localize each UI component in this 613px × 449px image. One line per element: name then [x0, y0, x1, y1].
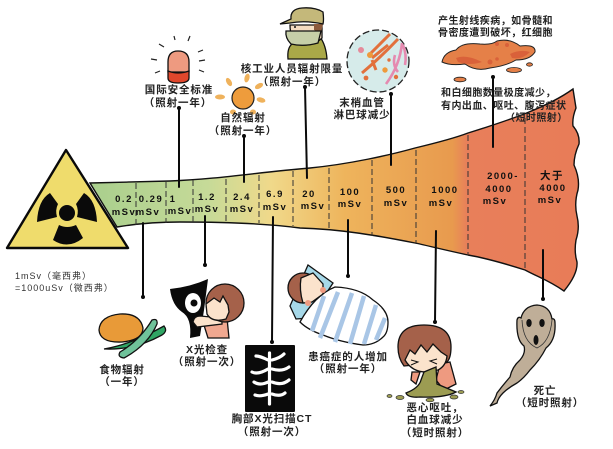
dose value labels: mSv [168, 206, 192, 217]
text: white blood cell symptoms: 和白细胞数量极度减少， [441, 86, 556, 99]
dose value labels: 大于 [540, 169, 564, 182]
label: x-ray exam: X光检查 [186, 343, 228, 356]
label: x-ray exam [173, 343, 241, 368]
label: capillaries and lymphocytes [334, 96, 390, 121]
dose value labels: 2.4 [233, 192, 251, 203]
label: capillaries and lymphocytes: 淋巴球减少 [334, 108, 390, 121]
dose value labels: 20 [302, 189, 316, 200]
dose value labels: 0.2 [115, 194, 133, 205]
icon: alarm siren [151, 36, 205, 83]
label: nuclear workers limit: （照射一年） [258, 75, 326, 88]
unit note: =1000uSv（微西弗） [15, 282, 114, 293]
dose value labels: mSv [538, 195, 562, 206]
label: food radiation: （一年） [99, 375, 145, 388]
dose value labels [112, 169, 567, 218]
dose value labels: 100 [340, 187, 360, 198]
label: chest CT scan: （照射一次） [238, 425, 306, 438]
icon: child hugging skeleton x-ray [170, 279, 244, 338]
dose value labels: 4000 [539, 183, 567, 194]
dose value labels: 1 [170, 194, 176, 205]
connector lines [141, 75, 545, 344]
icon: capillaries in a dashed circle [347, 30, 409, 92]
text: radiation diseases: 产生射线疾病，如骨髓和 [438, 14, 553, 27]
icon: food [99, 314, 166, 358]
label: nuclear workers limit [241, 62, 343, 88]
label: food radiation [99, 363, 145, 388]
label: death: （短时照射） [516, 396, 584, 409]
dose value labels: mSv [429, 198, 453, 209]
label: food radiation: 食物辐射 [99, 363, 145, 376]
label: x-ray exam: （照射一次） [173, 355, 241, 368]
unit note: 1mSv（毫西弗） [15, 270, 92, 281]
label: more cancer cases [308, 350, 388, 375]
dose value labels: 6.9 [266, 189, 284, 200]
text: white blood cell symptoms: 有内出血、呕吐、腹泻症状 [441, 99, 566, 112]
icon: chest x-ray film [245, 345, 295, 412]
label: international standard: （照射一年） [144, 96, 212, 109]
dose value labels: mSv [112, 207, 136, 218]
label: international standard [144, 83, 213, 109]
label: nausea and low white cells: （短时照射） [401, 426, 469, 439]
label: nausea and low white cells: 白血球减少 [406, 413, 464, 426]
label: capillaries and lymphocytes: 末梢血管 [339, 96, 385, 109]
label: death [516, 384, 584, 409]
dose value labels: 4000 [485, 184, 513, 195]
text: radiation diseases: 骨密度遭到破坏，红细胞 [438, 26, 553, 39]
dose value labels: mSv [263, 202, 287, 213]
icon: vomiting child [387, 325, 464, 402]
dose scale band [90, 89, 579, 291]
dose value labels: mSv [338, 199, 362, 210]
text: white blood cell symptoms [441, 86, 568, 124]
dose value labels: 0.29 [139, 194, 163, 205]
label: more cancer cases: （照射一年） [314, 362, 382, 375]
dose value labels: mSv [483, 196, 507, 207]
label: nausea and low white cells: 恶心呕吐， [406, 402, 464, 414]
text: radiation diseases [438, 14, 553, 39]
dose value labels: 2000- [487, 171, 519, 182]
label: natural radiation: 自然辐射 [220, 111, 266, 124]
label: natural radiation: （照射一年） [209, 124, 277, 137]
label: chest CT scan [232, 412, 312, 438]
dose value labels: mSv [384, 198, 408, 209]
icon: scream ghost [490, 305, 555, 406]
dose value labels: 1000 [431, 185, 459, 196]
dose value labels: mSv [136, 207, 160, 218]
label: death: 死亡 [534, 384, 556, 397]
label: international standard: 国际安全标准 [145, 83, 213, 96]
unit note [15, 270, 114, 293]
icon: cancer patient in bed [288, 265, 388, 345]
label: nausea and low white cells [401, 402, 469, 439]
dose value labels: mSv [195, 204, 219, 215]
icon: blood puddle [442, 40, 535, 82]
icon: sun [215, 73, 266, 114]
text: white blood cell symptoms: （短时照射） [505, 111, 568, 124]
icon: nuclear worker with mask [280, 8, 327, 59]
dose value labels: mSv [230, 204, 254, 215]
label: natural radiation [209, 111, 277, 137]
dose value labels: 1.2 [198, 192, 216, 203]
dose value labels: 500 [386, 185, 406, 196]
label: nuclear workers limit: 核工业人员辐射限量 [241, 62, 343, 75]
icon: radiation warning triangle [7, 150, 128, 248]
dose value labels: mSv [301, 201, 325, 212]
label: chest CT scan: 胸部X光扫描CT [232, 412, 312, 425]
label: more cancer cases: 患癌症的人增加 [308, 350, 388, 363]
